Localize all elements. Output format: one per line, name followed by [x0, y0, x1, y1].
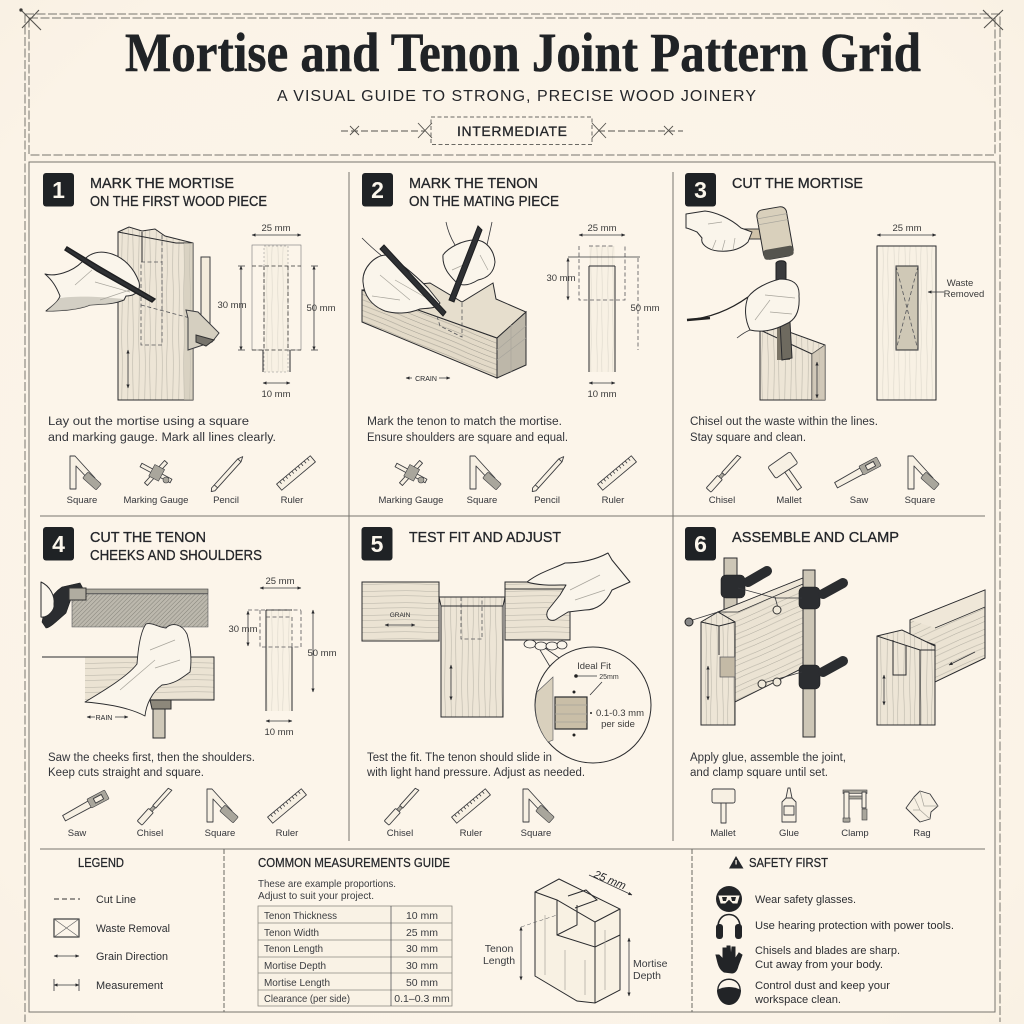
isometric joint diagram	[483, 868, 668, 1003]
measurement drawing 3: Removed	[944, 289, 984, 300]
tools row 2: Marking Gauge	[379, 495, 443, 506]
corner cross mark right	[983, 10, 1003, 30]
step 2 text: Mark the tenon to match the mortise.	[367, 416, 562, 428]
measurement table: 25 mm	[406, 927, 438, 939]
tools row 3: Square	[905, 495, 935, 506]
tools row 3	[706, 452, 939, 506]
tools row 4: Ruler	[276, 828, 298, 839]
right board	[505, 582, 570, 640]
text: dust: Control dust and keep your	[755, 980, 890, 992]
text: blades: Cut away from your body.	[755, 959, 883, 971]
measurement drawing 4	[228, 576, 337, 738]
illustration: sawing	[41, 582, 214, 738]
step 2 text	[367, 416, 568, 444]
measurement drawing 1: 30 mm	[217, 300, 247, 311]
tools row 3: Saw	[850, 495, 868, 506]
tools row 1: Square	[67, 495, 97, 506]
guide note: Adjust to suit your project.	[258, 890, 374, 902]
isometric joint diagram: Length	[483, 955, 515, 967]
number badge 3: 3	[694, 177, 707, 203]
grain arrow	[816, 362, 818, 398]
panel: step 3	[685, 173, 984, 506]
illustration: marking the tenon	[362, 222, 526, 383]
measurement drawing 4: 50 mm	[307, 648, 337, 659]
panel: safety first	[716, 856, 954, 1006]
heading 2: MARK THE TENON	[409, 175, 538, 192]
step 1 text	[48, 416, 276, 444]
step 5 text: Test the fit. The tenon should slide in	[367, 752, 552, 764]
legend heading: LEGEND	[78, 856, 124, 870]
hand on board	[85, 624, 191, 716]
text: hearing: Use hearing protection with power tools.	[755, 920, 954, 932]
heading 6: ASSEMBLE AND CLAMP	[732, 529, 899, 546]
grain label	[406, 373, 450, 383]
badge: intermediate	[431, 117, 592, 144]
step 5 text: with light hand pressure. Adjust as needed.	[366, 767, 585, 779]
tools row 2: Ruler	[602, 495, 624, 506]
guide heading: COMMON MEASUREMENTS GUIDE	[258, 856, 450, 870]
text: glasses: Wear safety glasses.	[755, 894, 856, 906]
icon: safety glasses	[716, 886, 742, 912]
heading 1	[90, 175, 267, 210]
measurement drawing 1: 25 mm	[261, 223, 291, 234]
tools row 5: Ruler	[460, 828, 482, 839]
grain label: RAIN	[96, 715, 112, 722]
work board	[42, 657, 214, 700]
illustration: marking the mortise	[45, 227, 219, 400]
icon: dust mask	[717, 979, 741, 1005]
legend: waste removal: Waste Removal	[96, 923, 170, 935]
illustration: clamped joint	[685, 558, 985, 737]
number badge 6	[685, 527, 716, 560]
measurement table: Mortise Depth	[264, 960, 326, 972]
guide note	[258, 878, 396, 902]
number badge 4: 4	[52, 531, 65, 557]
legend: grain direction: Grain Direction	[96, 951, 168, 963]
detail circle: ideal fit: per side	[601, 719, 635, 730]
step 1 text: and marking gauge. Mark all lines clearly.	[48, 432, 276, 444]
measurement drawing 4: 25 mm	[265, 576, 295, 587]
wood block	[760, 325, 825, 400]
tools row 6: Mallet	[710, 828, 736, 839]
heading 4: CHEEKS AND SHOULDERS	[90, 547, 262, 564]
number badge 4	[43, 527, 74, 560]
tools row 4: Saw	[68, 828, 86, 839]
front clamp bar	[803, 570, 815, 737]
step 3 text: Stay square and clean.	[690, 432, 806, 444]
isometric joint diagram: Tenon	[485, 943, 513, 955]
measurement drawing 2: 30 mm	[546, 273, 576, 284]
icon: hand	[716, 946, 742, 973]
step 4 text: Keep cuts straight and square.	[48, 767, 204, 779]
tools row 4: Chisel	[137, 828, 163, 839]
legend: cut line: Cut Line	[96, 894, 136, 906]
measurement drawing 3: 25 mm	[892, 223, 922, 234]
upright post	[439, 597, 505, 717]
saw	[41, 582, 208, 628]
measurement drawing 2: 25 mm	[587, 223, 617, 234]
chisel and hand	[687, 261, 799, 360]
step 6 text	[690, 752, 846, 779]
measurement table: Tenon Thickness	[264, 910, 337, 922]
tools row 2: Square	[467, 495, 497, 506]
isometric joint diagram: 25 mm	[591, 868, 628, 892]
heading 5: TEST FIT AND ADJUST	[409, 529, 561, 546]
title: Mortise and Tenon Joint Pattern Grid	[125, 22, 921, 83]
panel: step 2	[362, 173, 660, 506]
step 3 text: Chisel out the waste within the lines.	[690, 416, 878, 428]
panel: step 5	[362, 527, 651, 839]
bench leg	[150, 700, 171, 738]
text: dust	[754, 980, 890, 1006]
number badge 2: 2	[371, 177, 384, 203]
step 1 text: Lay out the mortise using a square	[48, 416, 249, 428]
measurement table: 30 mm	[406, 960, 438, 972]
measurement table: Tenon Width	[264, 927, 319, 939]
measurement table: 30 mm	[406, 943, 438, 955]
tools row 1	[67, 455, 315, 506]
legend: measurement: Measurement	[96, 980, 163, 992]
tools row 4: Square	[205, 828, 235, 839]
tools row 5: Square	[521, 828, 551, 839]
tools row 1: Ruler	[281, 495, 303, 506]
measurement table: 50 mm	[406, 977, 438, 989]
number badge 6: 6	[694, 531, 707, 557]
heading 2	[409, 175, 559, 210]
tools row 2: Pencil	[534, 495, 560, 506]
tools row 1: Pencil	[213, 495, 239, 506]
measurement table: 0.1–0.3 mm	[394, 993, 450, 1005]
icon: hearing protection	[716, 914, 742, 939]
heading 2: ON THE MATING PIECE	[409, 193, 559, 210]
heading 1: ON THE FIRST WOOD PIECE	[90, 193, 267, 210]
post	[701, 612, 735, 725]
measurement drawing 1: 50 mm	[306, 303, 336, 314]
tools row 4	[61, 787, 306, 839]
number badge 2	[362, 173, 393, 206]
isometric joint diagram: Depth	[633, 970, 661, 982]
number badge 1	[43, 173, 74, 206]
tools row 5	[384, 787, 554, 839]
illustration: chiselling the mortise	[686, 206, 825, 400]
text: blades	[755, 945, 900, 971]
grain label	[87, 712, 128, 722]
step 6 text: and clamp square until set.	[690, 767, 828, 779]
heading 3: CUT THE MORTISE	[732, 175, 863, 192]
step 5 text	[366, 752, 585, 779]
tools row 5: Chisel	[387, 828, 413, 839]
heading 4	[90, 529, 262, 564]
icon: grain arrow	[127, 350, 129, 388]
tools row 6: Glue	[779, 828, 799, 839]
tools row 6: Rag	[913, 828, 931, 839]
measurement drawing 2: 50 mm	[630, 303, 660, 314]
combination square	[186, 257, 219, 350]
measurement table: Mortise Length	[264, 977, 330, 989]
back clamp bar	[724, 558, 737, 620]
hand with pencil	[45, 247, 155, 311]
guide note: These are example proportions.	[258, 878, 396, 890]
detail circle: ideal fit: 0.1-0.3 mm	[596, 708, 644, 719]
panel: step 6	[685, 527, 985, 839]
number badge 5: 5	[371, 531, 384, 557]
hand right with pencil	[443, 222, 495, 302]
measurement table: Clearance (per side)	[264, 993, 350, 1005]
mallet and hand	[686, 206, 794, 260]
step 6 text: Apply glue, assemble the joint,	[690, 752, 846, 764]
hand left with pencil	[362, 238, 446, 316]
measurement drawing 1: 10 mm	[261, 389, 291, 400]
separated joint	[877, 590, 985, 725]
measurement table: Tenon Length	[264, 943, 323, 955]
safety heading: SAFETY FIRST	[749, 856, 828, 870]
panel: legend	[54, 856, 170, 992]
step 3 text	[690, 416, 878, 444]
clamped beam	[718, 578, 803, 702]
number badge 3	[685, 173, 716, 206]
badge: intermediate: INTERMEDIATE	[457, 123, 567, 139]
tools row 3: Mallet	[776, 495, 802, 506]
detail circle: ideal fit: 25mm	[599, 674, 619, 681]
heading 4: CUT THE TENON	[90, 529, 206, 546]
tools row 2	[379, 455, 636, 506]
measurement drawing 2: 10 mm	[587, 389, 617, 400]
text: blades: Chisels and blades are sharp.	[755, 945, 900, 957]
subtitle: A VISUAL GUIDE TO STRONG, PRECISE WOOD JOINERY	[277, 88, 756, 105]
step 2 text: Ensure shoulders are square and equal.	[367, 432, 568, 444]
number badge 1: 1	[52, 177, 65, 203]
step 4 text	[48, 752, 255, 779]
step 4 text: Saw the cheeks first, then the shoulders.	[48, 752, 255, 764]
measurement drawing 3	[877, 223, 984, 400]
tools row 1: Marking Gauge	[124, 495, 188, 506]
tools row 6	[710, 788, 938, 839]
measurement drawing 4: 30 mm	[228, 624, 258, 635]
detail circle: ideal fit: Ideal Fit	[577, 661, 611, 672]
hand	[524, 553, 630, 650]
measurement table: 10 mm	[406, 910, 438, 922]
measurement table	[258, 906, 452, 1006]
isometric joint diagram: Mortise	[633, 958, 668, 970]
main frame	[29, 162, 995, 1012]
panel: step 4	[41, 527, 337, 839]
clamp heads and handles	[685, 571, 843, 689]
tools row 3: Chisel	[709, 495, 735, 506]
left board: GRAIN	[390, 612, 411, 619]
number badge 5	[362, 527, 392, 560]
illustration: test fit	[362, 553, 651, 763]
left board	[362, 582, 439, 641]
grain label: CRAIN	[415, 376, 437, 383]
measurement drawing 3: Waste	[947, 278, 973, 289]
measurement drawing 4: 10 mm	[264, 727, 294, 738]
heading 1: MARK THE MORTISE	[90, 175, 234, 192]
measurement drawing 1	[217, 223, 336, 400]
panel: common measurements guide	[258, 856, 668, 1006]
corner cross mark	[20, 9, 41, 30]
badge ornament left	[341, 123, 432, 138]
detail circle: ideal fit	[535, 647, 651, 763]
badge ornament right	[592, 123, 683, 138]
tools row 6: Clamp	[841, 828, 869, 839]
text: dust: workspace clean.	[754, 994, 841, 1006]
measurement drawing 2	[546, 223, 660, 400]
panel: step 1	[43, 173, 336, 506]
